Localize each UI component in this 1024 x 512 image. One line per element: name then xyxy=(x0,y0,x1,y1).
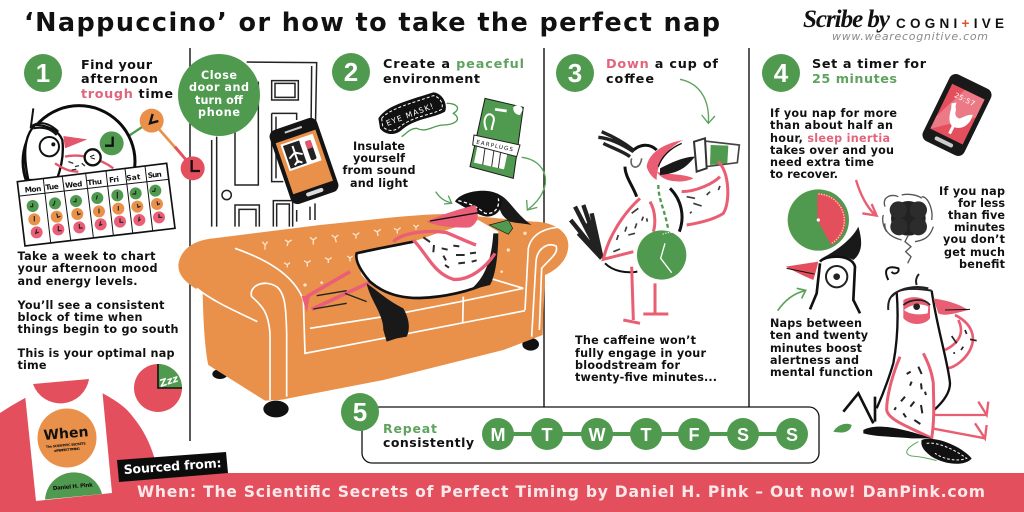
step 1 heading xyxy=(81,58,173,102)
callout: close door and turn off phone xyxy=(178,54,260,136)
text: less than five minutes: get much xyxy=(944,246,1005,259)
number 2 badge: 2 xyxy=(344,57,358,87)
illustration: bird with calendar and clocks xyxy=(17,106,205,246)
text: less than five minutes: minutes xyxy=(954,221,1005,234)
callout: close door and turn off phone: door and xyxy=(189,81,249,94)
label: sourced from: Sourced from: xyxy=(123,455,222,477)
arrows: to head xyxy=(436,157,545,210)
arrow to cup xyxy=(680,79,715,123)
book background red shape and band xyxy=(0,393,1024,512)
sofa xyxy=(178,214,568,417)
step 3 body text: bloodstream for xyxy=(575,359,680,372)
book cover: When xyxy=(43,424,89,444)
step 1 body text: things begin to go south xyxy=(18,323,179,336)
calendar: Wed xyxy=(65,179,83,190)
icon: phone airplane mode xyxy=(268,116,340,206)
book cover xyxy=(24,377,112,501)
pie chart: nap time: Zzz xyxy=(158,373,180,390)
text: insulate yourself: from sound xyxy=(342,164,416,177)
text: naps between: ten and twenty xyxy=(770,329,869,342)
step 2 heading: Create a peaceful xyxy=(383,57,524,72)
text: sleep inertia xyxy=(770,107,897,181)
calendar: Sat xyxy=(126,172,141,183)
step 4 heading: Set a timer for xyxy=(812,57,927,72)
book cover: Daniel H. Pink xyxy=(53,483,93,492)
text: insulate yourself: yourself xyxy=(353,152,405,165)
door xyxy=(212,62,317,227)
number 3 badge xyxy=(556,54,594,92)
bird xyxy=(302,191,532,342)
text: sleep inertia: than about half an xyxy=(770,119,893,132)
text: less than five minutes: benefit xyxy=(959,258,1006,271)
step 1 body text: You’ll see a consistent xyxy=(16,299,165,312)
text: insulate yourself xyxy=(342,140,416,190)
text: less than five minutes: for less xyxy=(958,197,1005,210)
repeat text: consistently xyxy=(383,435,474,450)
calendar: Tue xyxy=(45,182,59,192)
logo: Scribe by Cognitive: COGNI + IVE xyxy=(896,16,1004,31)
text: naps between: Naps between xyxy=(770,317,862,330)
stomach clock xyxy=(637,230,692,280)
callout: close door and turn off phone: Close xyxy=(201,69,237,82)
text: less than five minutes xyxy=(939,185,1006,271)
text: naps between: alertness and xyxy=(770,354,859,367)
calendar: Fri xyxy=(109,175,119,185)
step 3 body text: The caffeine won’t xyxy=(575,334,697,347)
pie timer xyxy=(788,189,849,251)
step 1 body text: Take a week to chart xyxy=(18,250,156,263)
title: ‘Nappuccino’ or how to take the perfect nap xyxy=(24,8,720,38)
text: naps between: minutes boost xyxy=(770,342,863,355)
weekday chain: S xyxy=(737,425,749,445)
step 4 heading xyxy=(812,57,927,87)
step 1 heading: afternoon xyxy=(81,72,158,87)
step 1 heading: Find your xyxy=(81,58,153,73)
panel: step 5 repeat consistently xyxy=(341,393,819,463)
number 1 badge xyxy=(24,54,62,92)
illustration: bird drinking coffee xyxy=(571,79,739,323)
book cover: of PERFECT TIMING xyxy=(54,447,80,453)
illustration: waking birds xyxy=(778,227,988,464)
weekday chain: F xyxy=(688,425,700,445)
number 4 badge xyxy=(762,54,800,92)
text: sleep inertia: takes over and you xyxy=(770,144,894,157)
timer clock and cloud xyxy=(788,180,933,263)
number 2 badge xyxy=(332,53,370,91)
step 1 heading: trough time xyxy=(81,87,173,102)
text: sleep inertia: to recover. xyxy=(770,168,838,181)
step 3 heading: coffee xyxy=(606,72,654,87)
logo: Scribe by Cognitive: www.wearecognitive.com xyxy=(832,30,988,43)
pie chart: nap time xyxy=(134,364,182,412)
step 3 body text: fully engage in your xyxy=(575,347,706,360)
weekday chain: S xyxy=(786,425,798,445)
calendar: Sun xyxy=(147,170,162,180)
step 1 body text xyxy=(16,250,179,372)
step 1 body text: your afternoon mood xyxy=(18,262,158,275)
icon: phone alarm xyxy=(920,72,994,158)
step 3 body text: twenty-five minutes... xyxy=(575,371,717,384)
callout: close door and turn off phone: turn off xyxy=(195,94,244,107)
weekday chain: T xyxy=(542,425,552,445)
arrow xyxy=(778,288,806,311)
logo: Scribe by Cognitive: Scribe by xyxy=(803,6,891,33)
book cover: The SCIENTIFIC SECRETS xyxy=(46,441,87,449)
calendar xyxy=(17,163,175,246)
step 3 body text xyxy=(575,334,717,384)
text: naps between: mental function xyxy=(770,366,873,379)
step 3 heading: Down a cup of xyxy=(606,57,718,72)
text: less than five minutes: than five xyxy=(948,209,1005,222)
logo: Scribe by Cognitive xyxy=(803,6,1004,43)
step 2 heading xyxy=(383,57,524,87)
icon: eye mask: EYE MASK! xyxy=(385,102,435,128)
text: naps between xyxy=(770,317,873,379)
cloud scribble xyxy=(883,194,933,263)
number 5 badge: 5 xyxy=(353,397,367,427)
repeat text xyxy=(383,421,474,450)
small bird face xyxy=(786,227,861,313)
repeat text: Repeat xyxy=(383,421,437,436)
source line: When: The Scientific Secrets of Perfect Timing by Daniel H. Pink – Out now! DanPink.com xyxy=(137,483,985,501)
calendar: Thu xyxy=(87,177,102,187)
label: sourced from xyxy=(117,452,228,482)
weekday chain: T xyxy=(640,425,652,445)
big sitting bird xyxy=(833,267,988,464)
step 1 xyxy=(16,54,205,412)
calendar: Mon xyxy=(24,184,42,195)
weekday chain: M xyxy=(490,425,506,445)
text: insulate yourself: and light xyxy=(350,177,409,190)
text: sleep inertia: hour, sleep inertia xyxy=(770,132,890,145)
step 1 body text: time xyxy=(18,359,47,372)
number 1 badge: 1 xyxy=(36,58,50,88)
step 1 body text: This is your optimal nap xyxy=(18,347,174,360)
step 3 heading xyxy=(606,57,718,87)
coffee cup xyxy=(694,138,739,172)
icon: earplugs xyxy=(470,98,523,178)
text: insulate yourself: Insulate xyxy=(353,140,405,153)
step 2 heading: environment xyxy=(383,72,480,87)
step 4 heading: 25 minutes xyxy=(812,72,897,87)
illustration: sofa with sleeping bird xyxy=(178,191,568,417)
text: less than five minutes: you don’t xyxy=(943,233,1006,246)
arrow xyxy=(856,180,877,216)
step 1 body text: block of time when xyxy=(18,311,143,324)
number 5 badge xyxy=(341,393,379,431)
icon: earplugs: EARPLUGS xyxy=(476,140,514,153)
number 3 badge: 3 xyxy=(568,58,582,88)
icon: eye mask xyxy=(378,92,458,137)
number 4 badge: 4 xyxy=(774,58,789,88)
text: less than five minutes: If you nap xyxy=(939,185,1005,198)
weekday chain xyxy=(482,418,808,450)
weekday chain: W xyxy=(588,425,606,445)
callout: close door and turn off phone: phone xyxy=(198,106,240,119)
text: sleep inertia: need extra time xyxy=(770,156,874,169)
icon: phone alarm: 25:57 xyxy=(953,91,976,108)
text: sleep inertia: If you nap for more xyxy=(770,107,897,120)
step 1 body text: and energy levels. xyxy=(18,275,138,288)
